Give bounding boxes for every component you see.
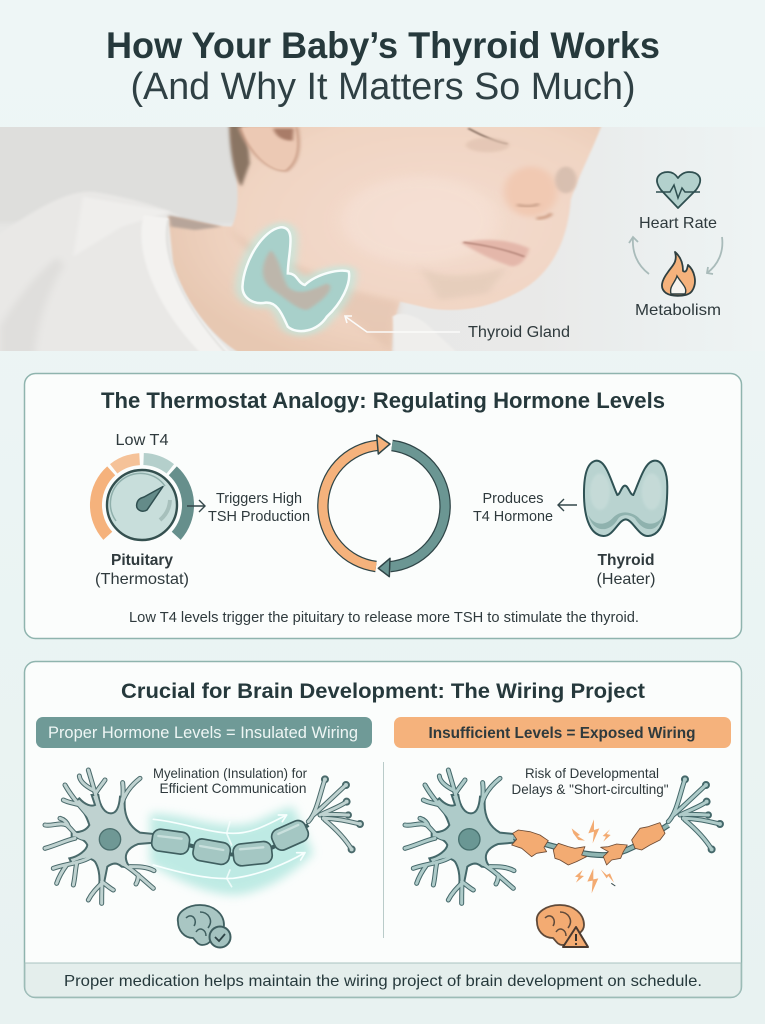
thyroid gland <box>242 227 349 331</box>
photo: sleeping baby with highlighted thyroid <box>0 127 622 351</box>
onesie <box>22 192 172 222</box>
text: triggers high TSH production <box>208 490 310 525</box>
label: thyroid <box>596 552 656 588</box>
neuron: exposed wiring <box>405 770 723 903</box>
callout: thyroid gland label <box>345 316 570 341</box>
caption: thermostat: Low T4 levels trigger the pituitary to release more TSH to stimulate the thyroid. <box>129 609 639 626</box>
onesie collar <box>154 217 220 357</box>
text: myelination <box>153 765 307 796</box>
text: produces T4 hormone: T4 Hormone <box>473 508 553 525</box>
text: produces T4 hormone: Produces <box>482 490 544 507</box>
footer strip <box>25 963 741 997</box>
pill: insulated wiring <box>36 717 372 748</box>
closed eyes <box>468 128 507 144</box>
chin shadow <box>428 272 500 298</box>
left pillow <box>4 127 236 221</box>
text: developmental risk: Delays & "Short-circulting" <box>512 781 669 797</box>
callout: thyroid gland label: Thyroid Gland <box>468 324 570 341</box>
text: developmental risk <box>512 765 669 797</box>
text: triggers high TSH production: Triggers High <box>216 490 302 507</box>
chart: feedback cycle arrows <box>323 435 445 577</box>
text: myelination: Myelination (Insulation) for <box>153 765 307 781</box>
ear <box>238 127 300 172</box>
icon: heart rate: Heart Rate <box>639 215 717 232</box>
cycle arrows: heart rate and metabolism <box>629 237 722 274</box>
title <box>106 25 660 108</box>
cheek light <box>341 177 498 263</box>
text: myelination: Efficient Communication <box>160 780 306 796</box>
hair <box>229 123 250 187</box>
thyroid glow <box>242 227 349 331</box>
label: pituitary <box>95 552 189 588</box>
icon: pituitary gauge <box>96 459 188 540</box>
face and neck <box>168 123 602 360</box>
pill: exposed wiring <box>394 717 731 748</box>
pill: insulated wiring: Proper Hormone Levels = Insulated Wiring <box>48 724 358 742</box>
heading: wiring project: Crucial for Brain Development: The Wiring Project <box>121 679 645 703</box>
icon: thyroid heater <box>584 461 667 536</box>
lips <box>461 240 529 266</box>
neuron: insulated <box>45 770 363 903</box>
footer strip: Proper medication helps maintain the wiring project of brain development on schedule. <box>64 973 702 990</box>
right collar <box>392 314 402 344</box>
arrow: gauge to TSH text <box>187 500 205 512</box>
pill: exposed wiring: Insufficient Levels = Exposed Wiring <box>428 725 696 742</box>
nose <box>504 167 558 217</box>
label: pituitary: (Thermostat) <box>95 571 189 588</box>
divider <box>383 762 384 938</box>
label: pituitary: Pituitary <box>111 552 173 569</box>
label: low T4: Low T4 <box>116 432 169 449</box>
arrow: thyroid to T4 text <box>558 499 577 511</box>
title: (And Why It Matters So Much) <box>130 66 636 108</box>
panel: thermostat analogy <box>24 374 742 638</box>
label: thyroid: Thyroid <box>598 552 654 569</box>
text: developmental risk: Risk of Developmental <box>525 765 659 781</box>
neck shadow <box>242 242 401 344</box>
icon: brain with check <box>178 905 230 948</box>
icon: flame metabolism: Metabolism <box>635 302 721 319</box>
text: produces T4 hormone <box>473 490 553 525</box>
panel: brain development <box>24 662 742 998</box>
text: triggers high TSH production: TSH Production <box>208 508 310 525</box>
heading: thermostat analogy: The Thermostat Analogy: Regulating Hormone Levels <box>101 388 665 413</box>
icon: heart rate <box>639 172 717 232</box>
label: thyroid: (Heater) <box>596 571 656 588</box>
title: How Your Baby’s Thyroid Works <box>106 25 660 66</box>
icon: flame metabolism <box>635 252 721 319</box>
icon: brain with warning <box>537 905 588 947</box>
glow around axon <box>150 807 313 895</box>
